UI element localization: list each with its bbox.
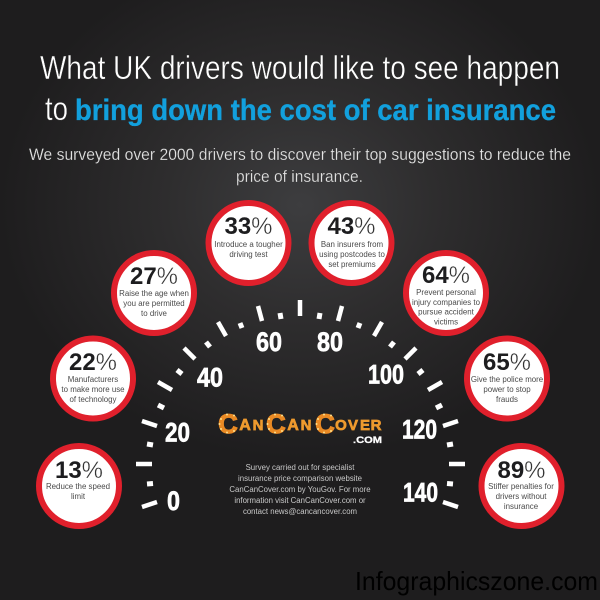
title bbox=[40, 49, 560, 127]
callout: 22%: to make more use bbox=[61, 385, 125, 394]
gauge speed numbers: 60 bbox=[256, 327, 282, 357]
callout: 64% bbox=[406, 253, 486, 333]
logo: CanCanCover.com: C bbox=[218, 409, 238, 439]
callout: 13% bbox=[39, 446, 119, 526]
callout: 33%: driving test bbox=[229, 250, 268, 259]
title: bring down the cost of car insurance bbox=[75, 94, 556, 127]
callout: 33%: 33% bbox=[224, 213, 273, 240]
callout: 43% bbox=[312, 203, 392, 283]
logo: CanCanCover.com: C bbox=[266, 409, 286, 439]
logo: CanCanCover.com: A bbox=[239, 417, 251, 434]
callout: 27% bbox=[114, 253, 194, 333]
callout: 64%: pursue accident bbox=[418, 308, 475, 316]
logo: CanCanCover.com bbox=[218, 409, 382, 446]
callout: 65%: power to stop bbox=[483, 385, 531, 394]
callout: 89% bbox=[482, 446, 562, 526]
logo: CanCanCover.com: N bbox=[301, 417, 311, 434]
callout: 64%: victims bbox=[434, 318, 458, 326]
title: to bbox=[45, 90, 68, 127]
intro text: price of insurance. bbox=[236, 168, 363, 186]
gauge speed numbers: 40 bbox=[197, 362, 223, 392]
callout: 13%: 13% bbox=[55, 457, 103, 484]
survey note bbox=[229, 463, 371, 516]
callout: 43%: set premiums bbox=[328, 260, 376, 269]
logo: CanCanCover.com: N bbox=[253, 417, 263, 434]
survey note: insurance price comparison website bbox=[238, 474, 362, 483]
callout: 27%: 27% bbox=[130, 263, 178, 290]
logo: CanCanCover.com: E bbox=[360, 417, 370, 434]
callout: 65%: Give the police more bbox=[471, 375, 544, 384]
callout: 13%: Reduce the speed bbox=[46, 482, 110, 491]
survey note: information visit CanCanCover.com or bbox=[234, 496, 366, 505]
callout: 22%: Manufacturers bbox=[68, 375, 118, 384]
gauge tick marks bbox=[136, 300, 465, 507]
logo: CanCanCover.com: C bbox=[315, 409, 335, 439]
callout: 43%: using postcodes to bbox=[319, 250, 386, 259]
callout: 43%: 43% bbox=[327, 213, 376, 240]
gauge speed numbers: 100 bbox=[368, 360, 404, 390]
callout: 64%: 64% bbox=[422, 262, 470, 289]
logo: CanCanCover.com: V bbox=[348, 417, 358, 434]
callout: 89%: insurance bbox=[504, 502, 539, 511]
gauge speed numbers: 120 bbox=[402, 414, 437, 444]
logo bulbs bbox=[218, 414, 332, 434]
callout: 22%: of technology bbox=[70, 395, 117, 404]
callout: 22%: 22% bbox=[69, 349, 117, 376]
callout: 33% bbox=[208, 203, 288, 283]
survey note: contact news@cancancover.com bbox=[243, 507, 357, 516]
gauge speed numbers: 20 bbox=[165, 418, 190, 448]
logo: CanCanCover.com: R bbox=[371, 417, 382, 434]
callout: 64%: injury companies to bbox=[412, 298, 481, 307]
gauge speed numbers: 80 bbox=[317, 327, 343, 357]
callout: 13%: limit bbox=[71, 492, 86, 501]
logo: CanCanCover.com: A bbox=[287, 417, 299, 434]
logo: CanCanCover.com: .COM bbox=[353, 435, 382, 446]
survey note: Survey carried out for specialist bbox=[246, 463, 355, 472]
callout: 22% bbox=[53, 338, 133, 418]
logo: CanCanCover.com: O bbox=[335, 417, 347, 434]
callout: 65%: frauds bbox=[496, 395, 518, 404]
callout: 27%: Raise the age when bbox=[119, 289, 189, 298]
gauge speed numbers: 0 bbox=[167, 486, 180, 516]
callout: 89%: Stiffer penalties for bbox=[488, 482, 554, 491]
gauge speed numbers bbox=[165, 327, 438, 516]
callout: 65%: 65% bbox=[483, 349, 531, 376]
intro text bbox=[29, 146, 571, 186]
callout: 27%: to drive bbox=[141, 309, 168, 318]
intro text: We surveyed over 2000 drivers to discover their top suggestions to reduce the bbox=[29, 146, 571, 164]
gauge speed numbers: 140 bbox=[403, 478, 438, 508]
survey note: CanCanCover.com by YouGov. For more bbox=[229, 485, 371, 494]
callout: 27%: you are permitted bbox=[123, 299, 185, 308]
callout: 89%: 89% bbox=[497, 457, 546, 484]
callout: 43%: Ban insurers from bbox=[321, 240, 384, 249]
callout: 33%: Introduce a tougher bbox=[214, 240, 283, 249]
callout: 64%: Prevent personal bbox=[416, 288, 476, 297]
callout: 65% bbox=[467, 338, 547, 418]
callout: 89%: drivers without bbox=[496, 492, 547, 501]
